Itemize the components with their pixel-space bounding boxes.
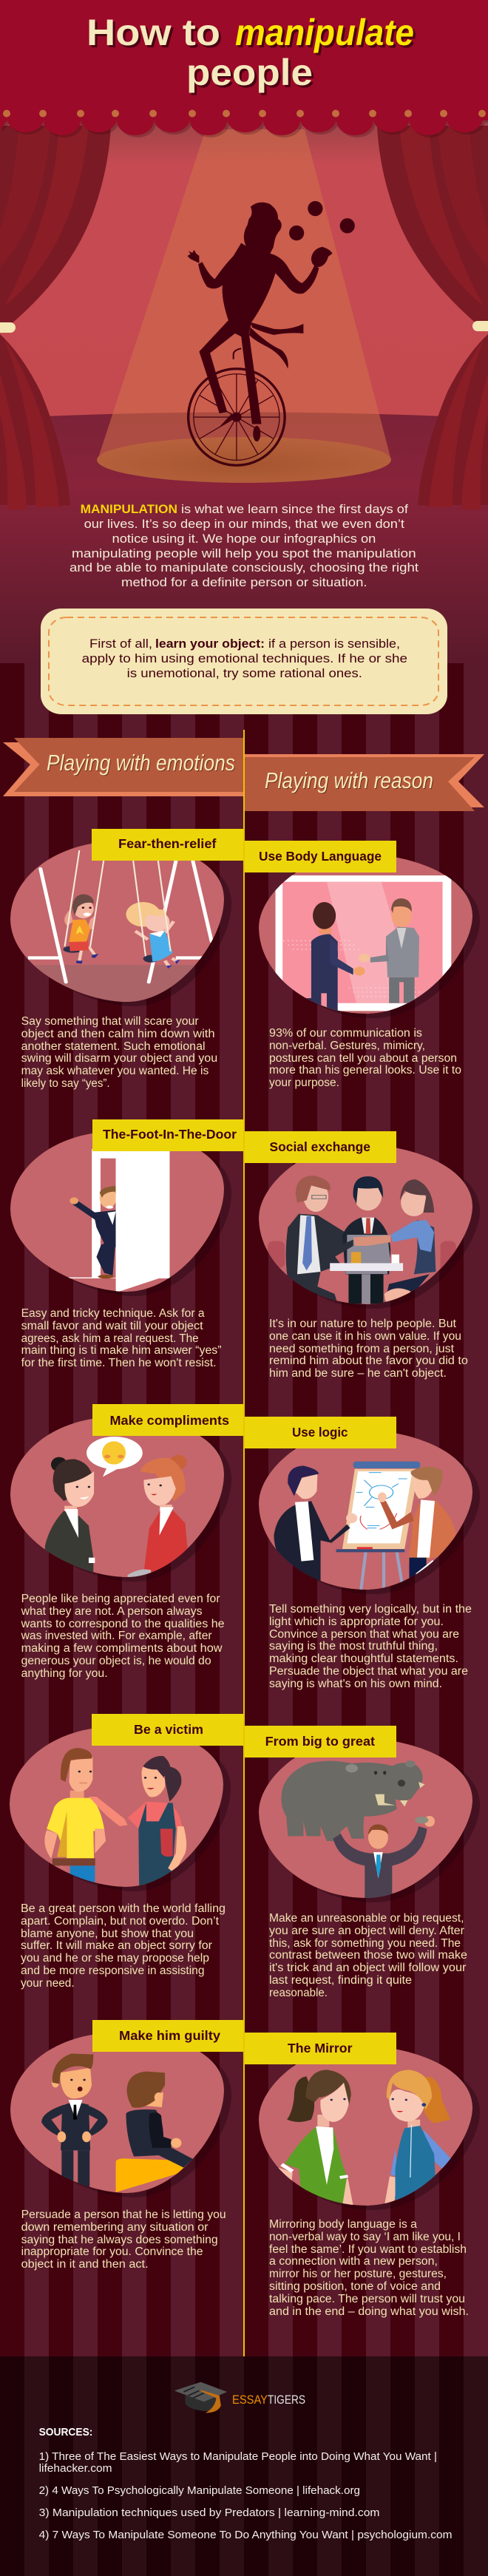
sources: 3) Manipulation techniques used by Predators | learning-mind.com (39, 2506, 379, 2519)
ribbon: Playing with reason: Playing with reason (265, 767, 433, 793)
body text: postures can tell you about a person (269, 1052, 457, 1065)
sources (39, 2426, 453, 2541)
body text: contrast between those two will make (269, 1949, 467, 1962)
body text: your need. (21, 1977, 75, 1990)
sources: SOURCES: (39, 2426, 92, 2438)
illustration: standing man and seated man (10, 2033, 224, 2194)
body text: apart. Complain, but not overdo. Don’t (21, 1915, 220, 1928)
sources: lifehacker.com (39, 2462, 112, 2475)
body text: this, ask for something you need. The (269, 1937, 461, 1950)
logo: EssayTigers (174, 2382, 305, 2413)
body text: blame anyone, but show that you (21, 1928, 194, 1940)
body text: main thing is ti make him answer “yes” (21, 1344, 222, 1357)
label: Social exchange (269, 1139, 370, 1154)
label: Use logic (292, 1425, 348, 1440)
callout: learn your object: if a person is sensible, (268, 637, 400, 651)
logo: EssayTigers: TIGERS (268, 2393, 305, 2407)
panel: The-Foot-In-The-Door (10, 1119, 243, 1369)
body text: object in it and then act. (21, 2258, 149, 2271)
body text: him and be sure – he can't object. (269, 1367, 447, 1380)
body text: reasonable. (269, 1987, 328, 1999)
body text: swing will disarm your object and you (21, 1052, 217, 1065)
body text: for the first time. Then he won't resist. (21, 1357, 217, 1369)
logo: EssayTigers: ESSAY (232, 2393, 268, 2407)
illustration: man lifting hippo and mouse (259, 1738, 472, 1898)
body text: and in the end – doing what you wish. (269, 2305, 469, 2318)
body text: was invested with. For example, after (21, 1630, 212, 1642)
unicycle (189, 348, 285, 465)
body text: down remembering any situation or (21, 2221, 209, 2234)
body text (269, 2218, 469, 2318)
spotlight pool (97, 437, 391, 483)
sources: 1) Three of The Easiest Ways to Manipulate People into Doing What You Want | (39, 2450, 437, 2463)
body text: suffer. It will make an object sorry for (21, 1939, 212, 1952)
label: The Mirror (288, 2041, 353, 2055)
ribbon: Playing with emotions (3, 738, 243, 796)
illustration: man at a door (10, 1131, 224, 1292)
stage backdrop (0, 111, 488, 418)
body text (269, 1318, 468, 1380)
body text: saying is what's on his own mind. (269, 1678, 442, 1690)
body text: likely to say “yes”. (21, 1077, 110, 1090)
juggler silhouette (187, 201, 355, 465)
ribbon: Playing with emotions: Playing with emotions (47, 750, 235, 776)
label: The-Foot-In-The-Door (103, 1127, 237, 1142)
panel: From big to great (245, 1726, 480, 1999)
body text: Easy and tricky technique. Ask for a (21, 1307, 205, 1320)
body text: last request, finding it quite (269, 1974, 412, 1987)
body text: making a few compliments about how (21, 1642, 223, 1655)
title: people (186, 52, 313, 93)
label (245, 1726, 396, 1758)
body text: agrees, ask him a real request. The (21, 1332, 199, 1345)
body text (21, 1593, 225, 1680)
spotlight beam (98, 129, 391, 460)
body text (269, 1603, 472, 1690)
label: Make him guilty (119, 2028, 220, 2043)
intro text: method for a definite person or situation. (121, 576, 367, 589)
body text: saying that he always does something (21, 2234, 218, 2246)
intro text: our lives. It’s so deep in our minds, that we even don’t (84, 518, 404, 531)
panel: Fear-then-relief (0, 829, 249, 1090)
body text: remind him about the favor you did to (269, 1355, 468, 1367)
callout: learn your object: is unemotional, try some rational ones. (127, 667, 362, 680)
valance with scallops (0, 0, 488, 138)
intro text (70, 503, 418, 589)
body text: your purpose. (269, 1077, 339, 1089)
body text: mirror his or her posture, gestures, (269, 2268, 447, 2280)
label (92, 2020, 243, 2052)
intro text: notice using it. We hope our infographics on (112, 532, 376, 546)
body text: small favor and wait till your object (21, 1320, 203, 1332)
body text: Persuade the object that what you are (269, 1665, 468, 1678)
body text: Tell something very logically, but in the (269, 1603, 472, 1616)
label (245, 1131, 396, 1163)
label: Use Body Language (259, 849, 382, 864)
body text: you are sure an object will deny. After (269, 1925, 464, 1937)
feet, hands and ribbons (187, 247, 333, 441)
body text: may ask whatever you wanted. He is (21, 1065, 209, 1077)
sources: 4) 7 Ways To Manipulate Someone To Do Anything You Want | psychologium.com (39, 2529, 453, 2541)
panel: Make him guilty (10, 2020, 243, 2271)
intro text: manipulating people will help you spot the manipulation (72, 547, 416, 560)
icon: graduation cap (174, 2382, 227, 2413)
body text: feel the same’. If you want to establish (269, 2243, 467, 2256)
label (245, 1417, 396, 1448)
title (87, 12, 414, 93)
panel: Make compliments (10, 1404, 243, 1680)
center divider line (243, 730, 245, 2356)
body text: it's trick and an object will follow your (269, 1962, 466, 1974)
body text: you and he or she may propose help (21, 1952, 209, 1965)
body text: need something from a person, just (269, 1343, 455, 1355)
panel: The Mirror (245, 2033, 480, 2318)
juggler legs (199, 320, 262, 424)
body text: generous your object is, he would do (21, 1655, 211, 1667)
body text: Persuade a person that he is letting you (21, 2209, 226, 2221)
body text: another statement. Such emotional (21, 1040, 206, 1053)
body text: anything for you. (21, 1667, 108, 1680)
body text: Say something that will scare your (21, 1015, 199, 1028)
intro text: MANIPULATION (81, 503, 177, 516)
label: Be a victim (134, 1722, 203, 1737)
callout: learn your object (41, 609, 447, 714)
label: From big to great (265, 1734, 375, 1749)
body text: what they are not. A person always (21, 1605, 203, 1618)
callout: learn your object: First of all, (89, 637, 152, 651)
body text: object and then calm him down with (21, 1028, 215, 1040)
label (92, 1714, 243, 1746)
sources: 2) 4 Ways To Psychologically Manipulate Someone | lifehack.org (39, 2484, 360, 2497)
body text: making clear thoughtful statements. (269, 1653, 458, 1665)
body text: talking pace. The person will trust you (269, 2293, 465, 2305)
title: How to (87, 12, 220, 53)
illustration: two men at a flipchart (259, 1429, 472, 1590)
panel: Social exchange (245, 1131, 480, 1380)
body text: sitting position, tone of voice and (269, 2280, 441, 2293)
body text (269, 1027, 461, 1089)
body text: Convince a person that what you are (269, 1628, 459, 1641)
illustration: handshake by a window (259, 853, 472, 1014)
illustration: two women and a compliment (10, 1417, 224, 1577)
callout: learn your object: apply to him using emotional techniques. If he or she (82, 652, 407, 665)
illustration: business meeting (259, 1144, 472, 1304)
body text: inappropriate for you. Convince the (21, 2245, 203, 2258)
body text: Be a great person with the world falling (21, 1902, 226, 1915)
panel: Be a victim (10, 1714, 243, 1990)
callout: learn your object: learn your object: (155, 637, 265, 651)
intro text: is what we learn since the first days of (181, 503, 408, 516)
body text (21, 1015, 217, 1090)
label (92, 1119, 243, 1151)
body text: one can use it in his own value. If you (269, 1330, 461, 1343)
body text: non-verbal. Gestures, mimicry, (269, 1040, 425, 1052)
body text (21, 2209, 226, 2271)
label (245, 2033, 396, 2064)
juggling balls (289, 201, 355, 240)
label (92, 1404, 243, 1436)
illustration: two women mirroring (259, 2045, 472, 2206)
body text: a connection with a new person, (269, 2255, 438, 2268)
intro text: and be able to manipulate consciously, choosing the right (70, 561, 418, 574)
body text: more than his general looks. Use it to (269, 1064, 461, 1077)
label: Make compliments (109, 1413, 229, 1428)
stage scene (0, 0, 488, 518)
stage floor (44, 413, 444, 518)
body text (21, 1307, 222, 1369)
body text: Mirroring body language is a (269, 2218, 417, 2231)
body text: People like being appreciated even for (21, 1593, 220, 1605)
body text: Make an unreasonable or big request, (269, 1912, 464, 1925)
label (245, 841, 396, 872)
body text: saying is the most truthful thing, (269, 1640, 438, 1653)
panel: Use Body Language (245, 841, 480, 1089)
panel: Use logic (245, 1417, 480, 1690)
illustration: kids on swings (10, 844, 224, 1002)
body text (269, 1912, 467, 1999)
body text: wants to correspond to the qualities he (21, 1618, 225, 1630)
body text: non-verbal way to say ‘I am like you, I (269, 2231, 461, 2243)
body text: 93% of our communication is (269, 1027, 422, 1040)
body text: and be more responsive in assisting (21, 1965, 204, 1977)
illustration: consoling a sad man (10, 1726, 223, 1887)
label (92, 829, 243, 861)
striped background (0, 663, 488, 2356)
footer background (0, 2356, 488, 2576)
title: manipulate (235, 12, 414, 53)
ribbon: Playing with reason (245, 754, 484, 811)
curtain left (0, 126, 111, 509)
body text: It's in our nature to help people. But (269, 1318, 457, 1330)
body text (21, 1902, 226, 1990)
curtain right (377, 126, 488, 509)
label: Fear-then-relief (118, 836, 217, 851)
body text: light which is appropriate for you. (269, 1616, 444, 1628)
juggler body (198, 203, 319, 322)
